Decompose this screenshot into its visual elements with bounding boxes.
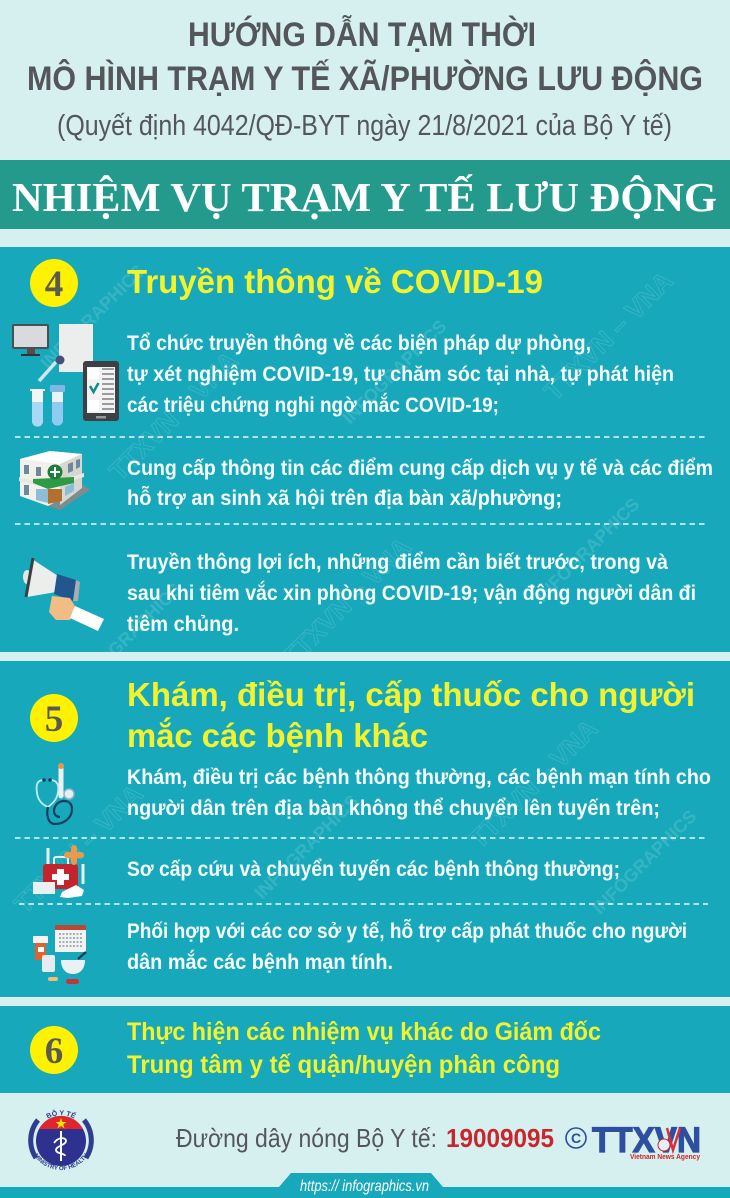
icon: megaphone and hand bbox=[23, 558, 104, 631]
logo: Ministry of Health emblem: BỘ Y TẾ bbox=[46, 1110, 77, 1118]
logo: Ministry of Health emblem bbox=[28, 1110, 94, 1170]
icon: medicine and calendar bbox=[33, 925, 86, 984]
text: task 5 item 1: người dân trên địa bàn không thể chuyển lên tuyến trên; bbox=[127, 797, 660, 820]
watermarks: TTXVN – VNA bbox=[538, 265, 679, 406]
logo: Ministry of Health emblem: MINISTRY OF HEALTH bbox=[36, 1153, 86, 1170]
header title: HƯỚNG DẪN TẠM THỜI bbox=[188, 16, 536, 54]
text: task 5 item 1 bbox=[127, 766, 711, 820]
text: task 4 item 3: sau khi tiêm vắc xin phòng COVID-19; vận động người dân đi bbox=[127, 581, 696, 605]
watermarks: INFOGRAPHICS bbox=[37, 261, 148, 373]
icon: first aid kit bbox=[33, 848, 84, 898]
watermarks: TTXVN – VNA bbox=[463, 713, 604, 854]
watermarks bbox=[8, 713, 700, 919]
number badge 6: 6 bbox=[45, 1031, 63, 1072]
text: task 4 item 1: các triệu chứng nghi ngờ mắc COVID-19; bbox=[127, 393, 499, 417]
text: task 5 item 3: Phối hợp với các cơ sở y tế, hỗ trợ cấp phát thuốc cho người bbox=[127, 919, 687, 943]
panel: task 6 bbox=[0, 1006, 730, 1093]
hotline: 19009095 bbox=[446, 1123, 554, 1153]
icon: stethoscope and thermometer bbox=[37, 763, 74, 824]
text: task 5 item 3 bbox=[127, 919, 687, 974]
number badge 6 bbox=[30, 1026, 78, 1074]
heading: task 5 bbox=[127, 676, 695, 754]
watermarks: INFOGRAPHICS bbox=[74, 579, 185, 691]
logo: TTXVN: Vietnam News Agency bbox=[630, 1152, 701, 1161]
watermarks: TTXVN – VNA bbox=[8, 778, 149, 919]
number badge 5: 5 bbox=[45, 699, 63, 740]
number badge 4: 4 bbox=[45, 264, 63, 305]
logo: TTXVN: TTXVN bbox=[592, 1121, 701, 1160]
panel: task 5 bbox=[0, 661, 730, 997]
text: task 5 item 2: Sơ cấp cứu và chuyển tuyến các bệnh thông thường; bbox=[127, 858, 620, 881]
icon: pharmacy building bbox=[19, 451, 90, 510]
text: task 4 item 3 bbox=[127, 551, 696, 636]
watermarks bbox=[37, 261, 679, 691]
hotline: Đường dây nóng Bộ Y tế: bbox=[176, 1123, 437, 1153]
text: task 4 item 1 bbox=[127, 332, 674, 417]
text: task 4 item 1: Tổ chức truyền thông về các biện pháp dự phòng, bbox=[127, 332, 591, 355]
watermarks: TTXVN – VNA bbox=[103, 345, 244, 486]
footer bar with website bbox=[0, 1173, 730, 1198]
watermarks: INFOGRAPHICS bbox=[339, 316, 450, 428]
heading: task 6: Trung tâm y tế quận/huyện phân công bbox=[127, 1051, 560, 1079]
panel: task 4 bbox=[0, 247, 730, 691]
heading: task 6 bbox=[127, 1018, 601, 1079]
footer bar with website: https:// infographics.vn bbox=[300, 1178, 429, 1195]
banner: section heading bbox=[0, 160, 730, 229]
text: task 4 item 3: tiêm chủng. bbox=[127, 613, 239, 636]
heading: task 5: Khám, điều trị, cấp thuốc cho người bbox=[127, 676, 695, 713]
text: task 4 item 2: hỗ trợ an sinh xã hội trên địa bàn xã/phường; bbox=[127, 486, 562, 510]
heading: task 4: Truyền thông về COVID-19 bbox=[127, 263, 543, 300]
watermarks: INFOGRAPHICS bbox=[589, 806, 700, 918]
watermarks: INFOGRAPHICS bbox=[532, 494, 643, 606]
watermarks: INFOGRAPHICS bbox=[251, 791, 362, 903]
heading: task 6: Thực hiện các nhiệm vụ khác do Giám đốc bbox=[127, 1018, 601, 1046]
text: task 4 item 1: tự xét nghiệm COVID-19, tự chăm sóc tại nhà, tự phát hiện bbox=[127, 363, 674, 386]
icon: monitor, tablet and test tubes bbox=[13, 324, 119, 426]
number badge 4 bbox=[30, 259, 78, 307]
number badge 5 bbox=[30, 694, 78, 742]
banner: section heading: NHIỆM VỤ TRẠM Y TẾ LƯU ĐỘNG bbox=[12, 174, 717, 220]
watermarks: TTXVN – VNA bbox=[276, 531, 417, 672]
heading: task 5: mắc các bệnh khác bbox=[127, 717, 428, 754]
header title bbox=[27, 16, 703, 142]
text: task 4 item 3: Truyền thông lợi ích, những điểm cần biết trước, trong và bbox=[127, 551, 668, 574]
text: task 4 item 2 bbox=[127, 457, 713, 510]
logo: TTXVN: C bbox=[571, 1130, 581, 1146]
text: task 5 item 3: dân mắc các bệnh mạn tính. bbox=[127, 950, 393, 974]
